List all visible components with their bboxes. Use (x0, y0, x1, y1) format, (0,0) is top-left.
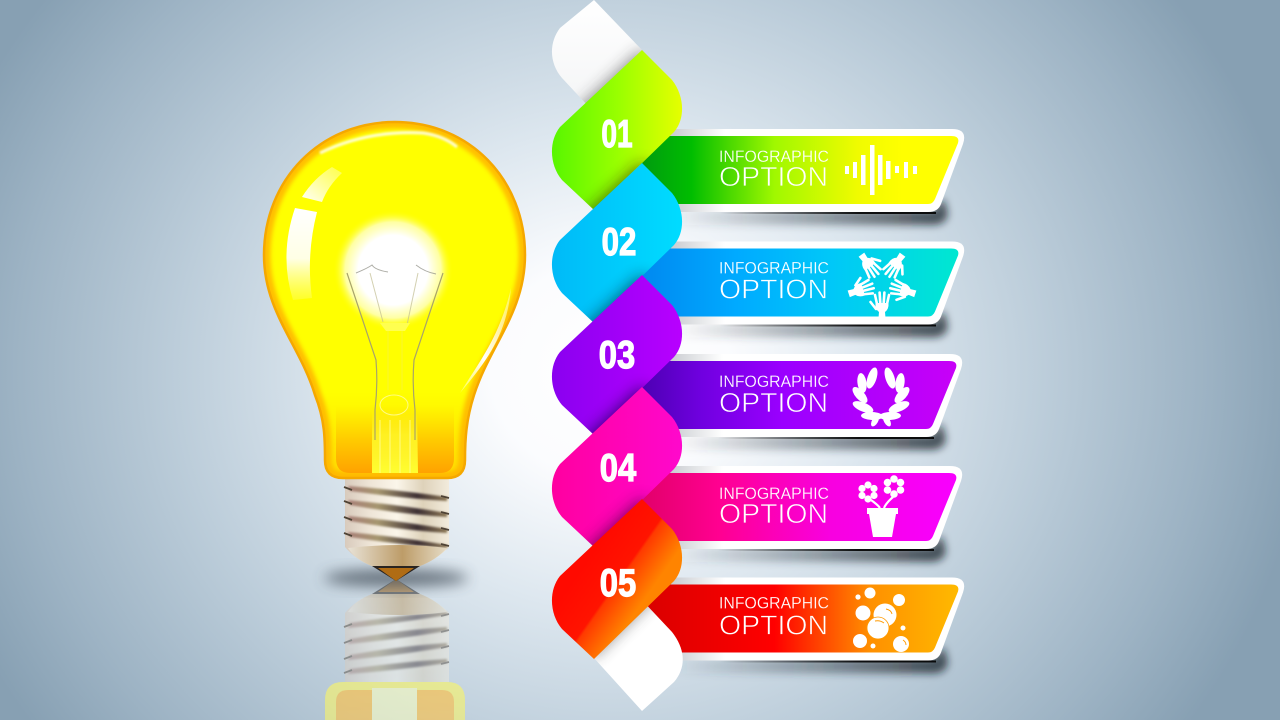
light bulb reflection (325, 579, 465, 720)
filament stem (372, 410, 418, 473)
ribbon tile 04 (552, 387, 682, 546)
icon: laurel wreath (850, 366, 912, 428)
banner 3 shadow line (718, 437, 934, 439)
right flower (884, 475, 904, 498)
ribbon tile 02 (552, 163, 682, 322)
banner 4 white frame (638, 466, 962, 549)
tile 01 face (552, 50, 682, 210)
banner 1 (640, 129, 964, 225)
banner 1 white frame (640, 129, 964, 212)
banner 4 fill (638, 473, 956, 541)
banner 2 shadow (670, 310, 948, 338)
ribbon tile 05 (552, 499, 682, 659)
icon: five hands (845, 248, 917, 318)
glass highlight upper (302, 167, 342, 202)
icon: bubbles (853, 588, 909, 652)
tile 02 face (552, 163, 682, 323)
banner 4 label: OPTION (719, 498, 828, 529)
banner 3 (638, 354, 962, 450)
banner 3 fill (638, 361, 956, 429)
banner 1 label: OPTION (719, 161, 828, 192)
glass highlight lower (286, 208, 317, 300)
banner 1 fill (640, 136, 958, 204)
icon: sound wave (845, 145, 917, 195)
banner 3 label: OPTION (719, 387, 828, 418)
banner 2 (640, 242, 964, 338)
top arc highlight (320, 133, 457, 153)
banner 3 shadow (668, 423, 946, 450)
ribbon tile: white bottom (594, 606, 683, 711)
tile 04 face (552, 387, 682, 547)
banner 3 label: INFOGRAPHIC (719, 373, 829, 391)
banner 5 label: INFOGRAPHIC (719, 594, 829, 612)
bulb glass (264, 122, 525, 478)
bulb inner shading (264, 122, 525, 478)
ribbon tile: white top (552, 0, 642, 103)
banner 4 shadow (668, 535, 946, 562)
banner 5 label (719, 594, 829, 640)
banner 2 shadow line (720, 324, 936, 326)
ribbon tile 03 (552, 275, 682, 434)
number 05: 05 (600, 560, 636, 605)
banner 5 label: OPTION (719, 610, 828, 640)
bulb screw base (344, 478, 449, 581)
banner 3 white frame (638, 354, 962, 437)
banner 5 white frame (640, 578, 964, 660)
number 01: 01 (601, 113, 633, 156)
banner 5 (640, 578, 964, 674)
right crescent highlight (460, 288, 511, 393)
banner 4 label: INFOGRAPHIC (719, 485, 829, 503)
filament wires (347, 265, 443, 473)
light bulb (264, 122, 525, 581)
icon: flower pot (858, 475, 904, 537)
banner 2 white frame (640, 242, 964, 324)
ground shadow (324, 569, 468, 587)
banner 4 shadow line (718, 549, 934, 551)
banner 2 label: OPTION (719, 274, 828, 304)
banner 1 shadow line (720, 212, 936, 214)
number 04: 04 (600, 445, 636, 490)
banner 5 shadow line (720, 660, 936, 662)
glow (333, 210, 453, 330)
number 02: 02 (602, 221, 636, 264)
pot (867, 508, 898, 537)
banner 4 label (719, 485, 829, 529)
tile 03 face (552, 275, 682, 435)
left flower (858, 481, 878, 503)
banner 4 (638, 466, 962, 562)
banner 1 shadow (670, 198, 948, 225)
ribbon tile 01 (552, 50, 682, 209)
banner 3 label (719, 373, 829, 418)
stems (871, 497, 893, 508)
tile 05 face (552, 499, 682, 659)
number 03: 03 (599, 332, 635, 377)
bulb outline (264, 122, 525, 478)
banner 5 fill (640, 584, 958, 652)
banner 2 label: INFOGRAPHIC (719, 260, 829, 278)
banner 2 fill (640, 248, 958, 316)
banner 1 label: INFOGRAPHIC (719, 148, 829, 166)
banner 1 label (719, 148, 829, 192)
banner 2 label (719, 260, 829, 304)
banner 5 shadow (670, 646, 948, 674)
